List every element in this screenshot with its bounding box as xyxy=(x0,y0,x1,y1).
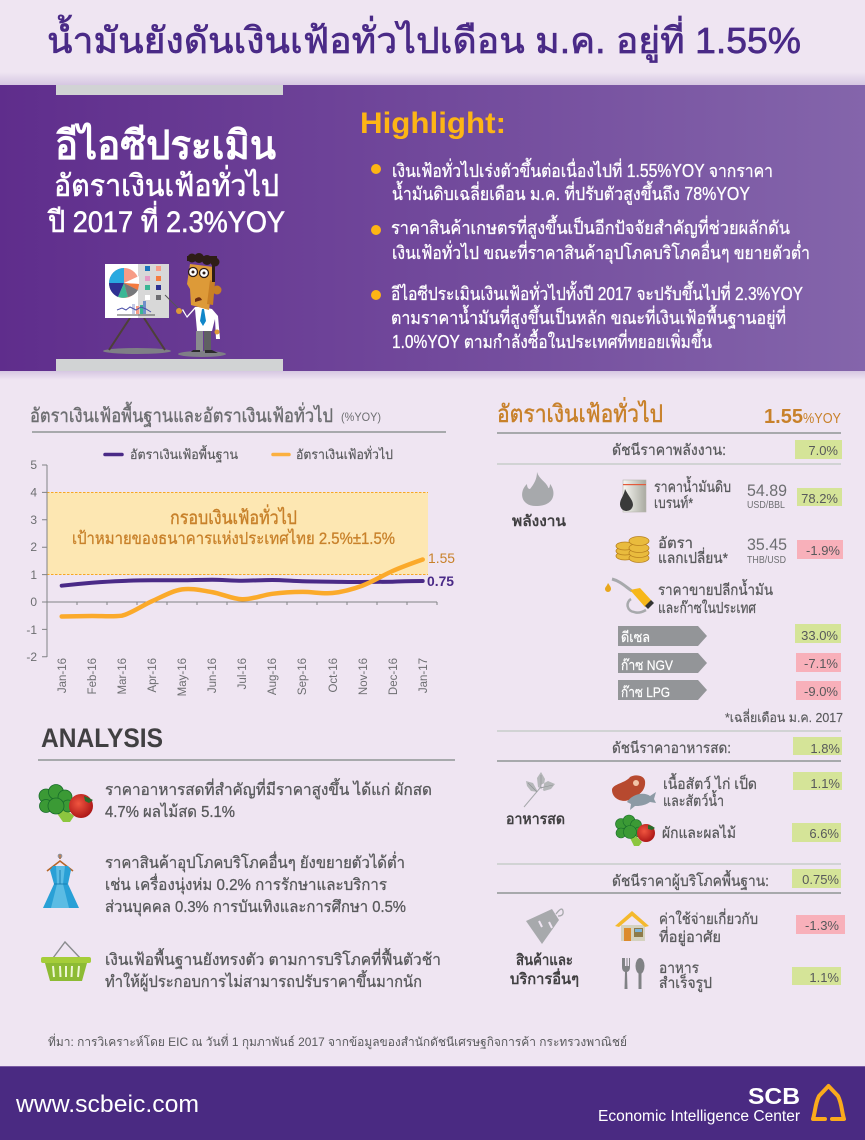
chart axes: Jan-16 xyxy=(57,658,69,693)
row: retail fuel heading with nozzle icon xyxy=(605,579,773,617)
chart legend: อัตราเงินเฟ้อทั่วไป xyxy=(296,446,393,462)
chart axes: Sep-16 xyxy=(297,658,309,695)
row: LPG: ก๊าซ LPG xyxy=(621,684,670,700)
line: core inflation xyxy=(62,580,423,586)
row: brent crude: ราคาน้ำมันดิบ xyxy=(654,476,731,496)
title: น้ำมันยังดันเงินเฟ้อทั่วไปเดือน ม.ค. อยู่ที่ 1.55% xyxy=(47,14,801,63)
chart axes: Aug-16 xyxy=(267,658,279,695)
analysis item 3: ทำให้ผู้ประกอบการไม่สามารถปรับราคาขึ้นมากนัก xyxy=(105,970,422,992)
chart axes: -1 xyxy=(26,623,37,637)
fresh food index row: 1.8% xyxy=(810,741,840,756)
table heading: อัตราเงินเฟ้อทั่วไป xyxy=(497,397,663,428)
heading: EIC forecast: ปี 2017 ที่ 2.3%YOY xyxy=(47,201,285,239)
core CPI index row xyxy=(497,869,841,894)
row: LPG xyxy=(618,680,841,700)
chart axes: 3 xyxy=(30,513,37,527)
icon: dress xyxy=(43,854,79,908)
highlight bullet 2: เงินเฟ้อทั่วไป ขณะที่ราคาสินค้าอุปโภคบริโภคอื่นๆ ขยายตัวต่ำ xyxy=(392,240,810,264)
row: housing: ค่าใช้จ่ายเกี่ยวกับ xyxy=(659,908,758,928)
icon: price tag xyxy=(526,909,563,944)
chart axes: Jun-16 xyxy=(207,658,219,693)
analysis item 2 xyxy=(105,851,406,917)
analysis item 2: เช่น เครื่องนุ่งห่ม 0.2% การรักษาและบริการ xyxy=(105,873,387,895)
chart axes: May-16 xyxy=(177,658,189,696)
table heading: 1.55 xyxy=(764,406,803,428)
chart legend: อัตราเงินเฟ้อพื้นฐาน xyxy=(130,445,238,463)
value label: core: 0.75 xyxy=(427,574,454,589)
row: diesel: 33.0% xyxy=(801,628,838,643)
chart heading xyxy=(30,402,446,433)
table heading: %YOY xyxy=(803,410,841,427)
chart legend xyxy=(105,445,393,463)
analysis item 1: 4.7% ผลไม้สด 5.1% xyxy=(105,802,235,821)
label: goods and services: บริการอื่นๆ xyxy=(510,968,579,988)
row: brent crude xyxy=(620,476,842,512)
row: meat and fish: และสัตว์น้ำ xyxy=(663,790,724,810)
row: NGV xyxy=(618,653,841,673)
analysis heading: ANALYSIS xyxy=(41,723,163,753)
highlight bullet 1: เงินเฟ้อทั่วไปเร่งตัวขึ้นต่อเนื่องไปที่ 1.55%YOY จากราคา xyxy=(392,158,773,181)
row: prepared food: สำเร็จรูป xyxy=(659,973,712,992)
chart axes: Jul-16 xyxy=(237,658,249,689)
icon: flame xyxy=(522,472,553,506)
footnote: monthly average: *เฉลี่ยเดือน ม.ค. 2017 xyxy=(725,709,843,725)
row: meat and fish: เนื้อสัตว์ ไก่ เป็ด xyxy=(663,773,757,793)
row: prepared food xyxy=(622,958,841,992)
analysis item 1 xyxy=(105,778,432,821)
chart axes: Oct-16 xyxy=(328,658,340,693)
row: prepared food: อาหาร xyxy=(659,960,699,977)
energy index row xyxy=(497,440,842,465)
brand name xyxy=(598,1083,800,1125)
row: meat and fish xyxy=(612,772,842,810)
row: brent crude: 54.89 xyxy=(747,481,787,500)
highlight bullet 1: น้ำมันดิบเฉลี่ยเดือน ม.ค. ที่ปรับตัวสูงขึ้นถึง 78%YOY xyxy=(392,181,750,205)
chart axes: Apr-16 xyxy=(147,658,159,693)
illustration: presenter with chart board xyxy=(103,253,226,357)
chart heading: (%YOY) xyxy=(341,410,381,424)
core CPI index row: 0.75% xyxy=(802,872,839,887)
chart axes: 5 xyxy=(30,458,37,472)
row: diesel: ดีเซล xyxy=(621,629,650,645)
row: LPG: -9.0% xyxy=(804,684,838,699)
chart axes: 0 xyxy=(30,595,37,609)
row: brent crude: เบรนท์* xyxy=(654,495,693,512)
analysis item 3 xyxy=(105,948,441,992)
analysis item 2: ราคาสินค้าอุปโภคบริโภคอื่นๆ ยังขยายตัวได้ต่ำ xyxy=(105,851,405,873)
row: prepared food: 1.1% xyxy=(809,970,839,985)
energy index row: ดัชนีราคาพลังงาน: xyxy=(612,442,726,459)
row: brent crude: 78.2% xyxy=(801,491,838,506)
row: exchange rate: แลกเปลี่ยน* xyxy=(658,547,728,567)
heading: EIC forecast xyxy=(47,122,285,239)
target band: กรอบเงินเฟ้อทั่วไป xyxy=(170,504,297,529)
chart axes xyxy=(26,458,437,696)
row: exchange rate: 35.45 xyxy=(747,535,787,554)
panel: hero highlight banner xyxy=(0,85,865,380)
panel: inflation breakdown table xyxy=(497,397,845,992)
chart axes: Jan-17 xyxy=(418,658,430,693)
row: vegetables and fruit: ผักและผลไม้ xyxy=(662,824,736,842)
analysis item 1: ราคาอาหารสดที่สำคัญที่มีราคาสูงขึ้น ได้แก่ ผักสด xyxy=(105,778,432,800)
chart axes: 1 xyxy=(30,568,37,582)
row: NGV: ก๊าซ NGV xyxy=(621,657,674,673)
value label: headline: 1.55 xyxy=(428,551,455,566)
icon: vegetables xyxy=(39,784,93,822)
target band: เป้าหมายของธนาคารแห่งประเทศไทย 2.5%±1.5% xyxy=(72,528,395,548)
chart heading: อัตราเงินเฟ้อพื้นฐานและอัตราเงินเฟ้อทั่วไป xyxy=(30,402,333,427)
chart axes: Dec-16 xyxy=(388,658,400,695)
source note: ที่มา: การวิเคราะห์โดย EIC ณ วันที่ 1 กุมภาพันธ์ 2017 จากข้อมูลของสำนักดัชนีเศรษฐกิจการค้า กระทรวงพาณิชย์ xyxy=(48,1033,627,1050)
row: exchange rate xyxy=(616,535,843,567)
highlight bullet 3 xyxy=(371,281,803,352)
row: retail fuel heading with nozzle icon: ราคาขายปลีกน้ำมัน xyxy=(658,579,773,599)
label: fresh food: อาหารสด xyxy=(506,811,565,828)
highlight bullet 2: ราคาสินค้าเกษตรที่สูงขึ้นเป็นอีกปัจจัยสำคัญที่ช่วยผลักดัน xyxy=(391,215,790,239)
panel: analysis xyxy=(38,723,455,992)
row: diesel xyxy=(618,624,841,646)
website: www.scbeic.com xyxy=(15,1091,199,1118)
heading: Highlight: Highlight: xyxy=(360,107,506,140)
row: NGV: -7.1% xyxy=(804,656,838,671)
icon: shopping basket xyxy=(41,942,91,981)
fresh food index row: ดัชนีราคาอาหารสด: xyxy=(612,740,731,757)
target band xyxy=(47,492,428,574)
row: vegetables and fruit xyxy=(616,815,841,846)
energy index row: 7.0% xyxy=(808,443,838,458)
chart axes: 2 xyxy=(30,540,37,554)
row: meat and fish: 1.1% xyxy=(810,776,840,791)
chart axes: -2 xyxy=(26,650,37,664)
row: housing: -1.3% xyxy=(805,918,839,933)
line: headline inflation xyxy=(62,560,423,616)
icon: wheat xyxy=(524,772,555,807)
analysis item 3: เงินเฟ้อพื้นฐานยังทรงตัว ตามการบริโภคที่ฟื้นตัวช้า xyxy=(105,948,441,969)
brand name: Economic Intelligence Center xyxy=(598,1108,800,1125)
icon: SCB logo xyxy=(813,1086,844,1119)
heading: EIC forecast: อีไอซีประเมิน xyxy=(55,122,276,168)
label: goods and services: สินค้าและ xyxy=(516,951,573,969)
core CPI index row: ดัชนีราคาผู้บริโภคพื้นฐาน: xyxy=(612,870,769,890)
row: vegetables and fruit: 6.6% xyxy=(809,826,839,841)
highlight bullet 3: ตามราคาน้ำมันที่สูงขึ้นเป็นหลัก ขณะที่เงินเฟ้อพื้นฐานอยู่ที่ xyxy=(391,305,786,329)
row: housing: ที่อยู่อาศัย xyxy=(659,926,721,946)
panel: footer xyxy=(0,1066,865,1140)
label: goods and services xyxy=(510,951,579,988)
row: exchange rate: -1.9% xyxy=(806,543,840,558)
heading: EIC forecast: อัตราเงินเฟ้อทั่วไป xyxy=(54,165,279,203)
fresh food index row xyxy=(497,737,842,762)
row: retail fuel heading with nozzle icon: และก๊าซในประเทศ xyxy=(658,599,756,617)
panel: inflation line chart xyxy=(26,402,455,696)
highlight bullet 2 xyxy=(371,215,810,264)
highlight bullet 1 xyxy=(371,158,773,205)
table heading xyxy=(497,397,841,434)
chart axes: Feb-16 xyxy=(87,658,99,694)
row: brent crude: USD/BBL xyxy=(747,500,785,511)
label: energy: พลังงาน xyxy=(512,513,567,530)
chart axes: 4 xyxy=(30,486,37,500)
highlight bullet 3: 1.0%YOY ตามกำลังซื้อในประเทศที่ทยอยเพิ่มขึ้น xyxy=(392,329,712,352)
analysis item 2: ส่วนบุคคล 0.3% การบันเทิงและการศึกษา 0.5% xyxy=(105,899,406,917)
row: housing xyxy=(615,908,845,946)
highlight bullet 3: อีไอซีประเมินเงินเฟ้อทั่วไปทั้งปี 2017 จะปรับขึ้นไปที่ 2.3%YOY xyxy=(391,281,803,304)
row: exchange rate: THB/USD xyxy=(747,555,786,566)
chart axes: Nov-16 xyxy=(358,658,370,695)
row: exchange rate: อัตรา xyxy=(658,535,693,552)
chart axes: Mar-16 xyxy=(117,658,129,694)
brand name: SCB xyxy=(748,1083,800,1109)
